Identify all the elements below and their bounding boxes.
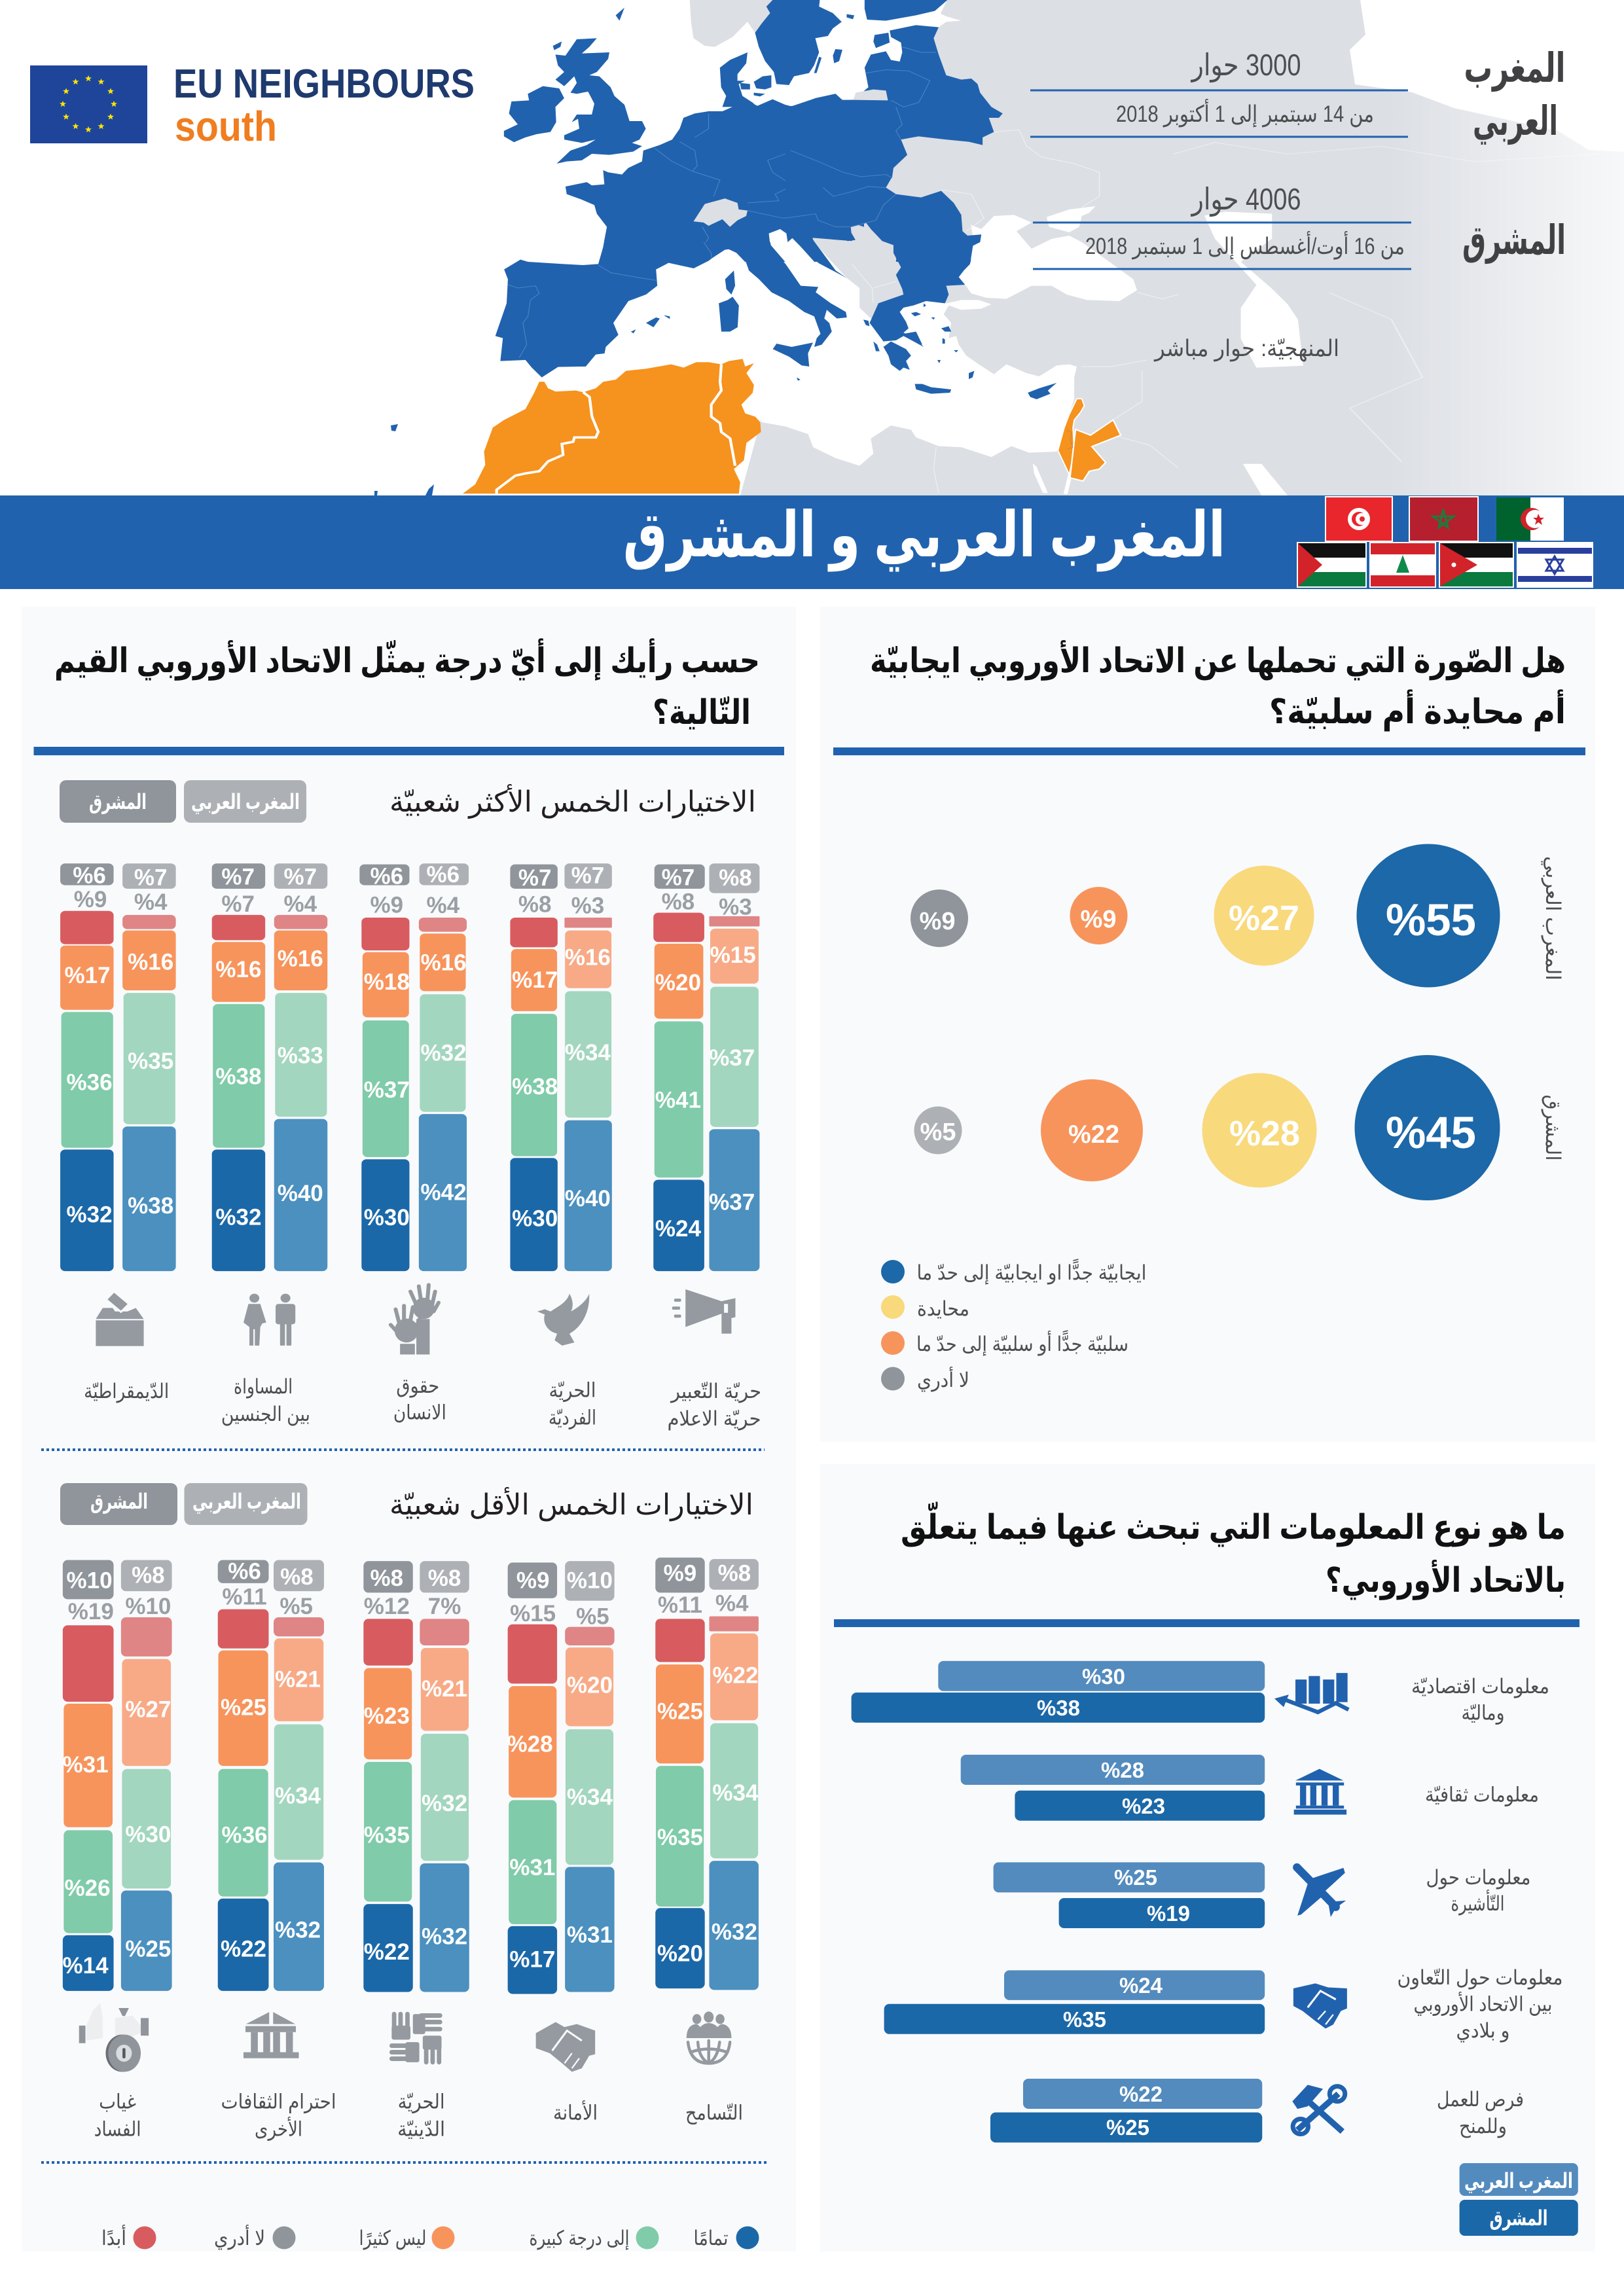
respect for other cultures: Maghreb bar: %32	[275, 1917, 321, 1943]
absence of corruption: Mashreq bar: %26	[65, 1876, 111, 1901]
subheading: five most popular: الاختيارات الخمس الأكثر شعبيّة	[389, 783, 756, 819]
freedom of expression: Mashreq bar: %20	[655, 970, 701, 996]
legend item: do not know: لا أدري	[214, 2225, 265, 2250]
bar group: cultural information	[961, 1755, 1265, 1821]
brand name: EU NEIGHBOURS	[173, 62, 475, 107]
legend item: do not know	[214, 2225, 296, 2250]
bubble: do not know 5	[914, 1106, 962, 1155]
freedom of expression: Maghreb bar: %37	[709, 1189, 755, 1215]
label: human rights	[393, 1374, 446, 1424]
tolerance: Maghreb bar	[709, 1559, 759, 1990]
human rights: Mashreq bar: %6	[370, 863, 403, 889]
religious freedom: Mashreq bar	[363, 1561, 413, 1992]
icon: handshake	[536, 2022, 595, 2072]
label: economic and financial information	[1411, 1675, 1549, 1725]
bubble: negative 9	[1070, 887, 1127, 944]
gender equality: Maghreb bar: %7	[283, 865, 317, 890]
label: democracy: الدّيمقراطيّة	[84, 1380, 169, 1403]
heading: EU values question	[54, 638, 760, 732]
gender equality: Mashreq bar	[212, 863, 265, 1271]
human rights: Mashreq bar: %37	[364, 1077, 410, 1103]
label: visa information: معلومات حول	[1426, 1866, 1530, 1890]
honesty: Mashreq bar	[507, 1562, 557, 1994]
democracy: Maghreb bar: %16	[128, 950, 173, 975]
gender equality: Maghreb bar: %16	[278, 946, 323, 971]
label: cooperation information	[1397, 1966, 1563, 2043]
label: gender equality: بين الجنسين	[221, 1403, 310, 1426]
religious freedom: Mashreq bar: %8	[370, 1566, 403, 1591]
label: freedom of expression and media: حريّة التّعبير	[670, 1380, 761, 1403]
legend item: neutral: محايدة	[917, 1297, 969, 1320]
legend item: do not know: لا أدري	[917, 1367, 969, 1392]
label: absence of corruption	[94, 2090, 141, 2141]
tolerance: Mashreq bar: %35	[657, 1825, 703, 1850]
bubble: do not know 9: %9	[920, 908, 955, 935]
label: cooperation information: و بلادي	[1456, 2019, 1509, 2043]
icon: classical building	[244, 2012, 298, 2058]
gender equality: Mashreq bar: %16	[215, 957, 261, 982]
label: human rights: الانسان	[393, 1401, 446, 1424]
freedom of expression: Maghreb bar: %8	[719, 865, 752, 891]
absence of corruption: Mashreq bar: %19	[68, 1599, 114, 1624]
legend chip: Maghreb	[185, 1483, 308, 1525]
icon: four joined hands	[391, 2014, 442, 2062]
label: jobs and grants: وللمنح	[1459, 2115, 1507, 2138]
label: individual freedom: الفرديّة	[549, 1407, 596, 1430]
religious freedom: Maghreb bar: %8	[428, 1566, 461, 1591]
label: freedom of expression and media	[668, 1380, 761, 1431]
legend item: to a large extent: إلى درجة كبيرة	[529, 2227, 630, 2250]
tolerance: Maghreb bar: %4	[715, 1591, 749, 1617]
honesty: Maghreb bar	[565, 1561, 615, 1992]
freedom of expression: Maghreb bar: %37	[709, 1045, 755, 1071]
honesty: Mashreq bar: %17	[509, 1947, 555, 1973]
label: human rights: حقوق	[396, 1374, 439, 1398]
freedom of expression: Maghreb bar: %15	[710, 942, 756, 968]
democracy: Maghreb bar: %4	[134, 889, 168, 915]
human rights: Maghreb bar: %4	[427, 893, 460, 918]
legend chip: Maghreb: المغرب العربي	[192, 1490, 301, 1514]
freedom of expression: Mashreq bar: %8	[662, 889, 695, 915]
religious freedom: Mashreq bar: %23	[364, 1703, 410, 1729]
religious freedom: Maghreb bar: 7%	[428, 1594, 461, 1619]
democracy: Maghreb bar: %35	[128, 1049, 173, 1074]
legend item: negative: سلبيّة جدًّا أو سلبيّة إلى حدّ ما	[916, 1329, 1128, 1356]
legend chip: Maghreb	[1460, 2163, 1578, 2196]
label: honesty: الأمانة	[553, 2100, 598, 2124]
fieldwork info: Mashreq	[1033, 182, 1411, 270]
freedom of expression: Mashreq bar: %24	[655, 1216, 701, 1242]
legend chip: Mashreq: المشرق	[1490, 2206, 1547, 2231]
respect for other cultures: Maghreb bar: %21	[275, 1666, 321, 1692]
individual freedom: Mashreq bar	[510, 865, 558, 1271]
icon: financial chart	[1274, 1673, 1348, 1712]
label: respect for other cultures: احترام الثقافات	[221, 2090, 336, 2113]
religious freedom: Maghreb bar: %32	[422, 1791, 467, 1816]
bubble: do not know 9	[911, 889, 968, 947]
label: economic and financial information: وماليّة	[1461, 1702, 1504, 1725]
human rights: Mashreq bar: %30	[364, 1205, 410, 1230]
honesty: Maghreb bar: %20	[567, 1673, 613, 1698]
heading: information sought question: بالاتحاد الأوروبي؟	[1326, 1559, 1566, 1600]
tolerance: Mashreq bar: %11	[658, 1592, 702, 1618]
absence of corruption: Maghreb bar: %27	[125, 1696, 171, 1722]
flag: Morocco	[1409, 496, 1479, 542]
bubble: negative 9: %9	[1081, 906, 1116, 933]
label: absence of corruption: غياب	[99, 2090, 136, 2113]
democracy: Mashreq bar: %9	[74, 887, 107, 912]
bar group: visa information	[994, 1862, 1265, 1928]
flags	[1297, 496, 1593, 588]
respect for other cultures: Maghreb bar: %8	[280, 1564, 314, 1590]
tolerance: Maghreb bar: %8	[718, 1561, 751, 1587]
honesty: Maghreb bar: %5	[576, 1604, 609, 1629]
region label: Maghreb: المغرب	[1464, 46, 1566, 92]
heading: EU values question: التّالية؟	[653, 694, 751, 732]
tolerance: Maghreb bar: %34	[712, 1780, 759, 1806]
icon: bribe and coin	[79, 2003, 149, 2072]
gender equality: Maghreb bar: %4	[283, 891, 317, 917]
bar group: cooperation information: %24	[1119, 1973, 1163, 1998]
bubble: positive 45: %45	[1386, 1107, 1476, 1158]
region label: Maghreb: العربي	[1473, 99, 1558, 145]
individual freedom: Mashreq bar: %7	[518, 865, 551, 891]
absence of corruption: Maghreb bar: %10	[125, 1594, 171, 1619]
icon: raised hands	[391, 1285, 439, 1354]
legend item: never	[101, 2225, 156, 2250]
human rights: Mashreq bar: %18	[364, 969, 410, 995]
religious freedom: Mashreq bar: %22	[364, 1939, 410, 1965]
freedom of expression: Maghreb bar	[709, 863, 759, 1271]
freedom of expression: Maghreb bar: %3	[719, 895, 752, 920]
flag: Israel	[1517, 542, 1593, 588]
legend item: not much: ليس كثيرًا	[359, 2227, 427, 2250]
label: cooperation information: معلومات حول التّعاون	[1397, 1966, 1563, 1990]
absence of corruption: Maghreb bar: %8	[132, 1563, 165, 1588]
democracy: Mashreq bar: %17	[65, 963, 111, 988]
bubble: positive 45	[1355, 1055, 1500, 1200]
heading: image of the EU question	[870, 639, 1566, 732]
bubble row: Mashreq	[914, 1055, 1500, 1200]
democracy: Maghreb bar: %38	[128, 1193, 173, 1219]
icon: building	[1294, 1769, 1346, 1815]
freedom of expression: Mashreq bar: %41	[655, 1087, 701, 1113]
label: gender equality	[221, 1375, 310, 1426]
legend item: do not know	[881, 1367, 969, 1392]
bar group: visa information: %25	[1114, 1865, 1157, 1890]
label: religious freedom: الحريّة	[398, 2090, 445, 2113]
region label: Maghreb	[1464, 46, 1566, 145]
bar group: economic and financial information: %30	[1082, 1664, 1125, 1689]
title band	[0, 495, 1624, 589]
subheading: five least popular: الاختيارات الخمس الأقل شعبيّة	[389, 1486, 753, 1522]
bubble: negative 22: %22	[1068, 1121, 1119, 1149]
legend chip: Mashreq	[60, 1483, 177, 1525]
legend item: neutral	[881, 1295, 969, 1320]
legend item: positive	[881, 1258, 1147, 1285]
row label: Mashreq: المشرق	[1541, 1094, 1564, 1161]
flag: Palestine	[1297, 542, 1367, 588]
respect for other cultures: Mashreq bar: %6	[228, 1558, 261, 1584]
brand name	[173, 62, 475, 150]
human rights: Maghreb bar: %6	[427, 862, 460, 888]
human rights: Maghreb bar: %32	[421, 1041, 467, 1066]
democracy: Mashreq bar: %6	[73, 863, 106, 889]
absence of corruption: Maghreb bar	[121, 1560, 172, 1991]
tolerance: Maghreb bar: %32	[712, 1919, 757, 1945]
individual freedom: Maghreb bar: %34	[565, 1040, 611, 1066]
absence of corruption: Mashreq bar: %14	[63, 1953, 109, 1979]
honesty: Mashreq bar: %31	[509, 1855, 555, 1880]
gender equality: Mashreq bar: %7	[221, 865, 255, 890]
religious freedom: Mashreq bar: %35	[364, 1822, 410, 1848]
tolerance: Maghreb bar: %22	[712, 1662, 758, 1688]
bubble: do not know 5: %5	[920, 1119, 956, 1146]
human rights: Maghreb bar: %42	[421, 1179, 467, 1205]
legend chip: Mashreq: المشرق	[89, 790, 147, 814]
heading: image of the EU question: أم محايدة أم سلبيّة؟	[1269, 689, 1566, 732]
fieldwork info: Maghreb: من 14 سبتمبر إلى 1 أكتوبر 2018	[1116, 99, 1374, 128]
fieldwork info: Mashreq: 4006 حوار	[1191, 182, 1301, 217]
icon: woman and man	[244, 1294, 295, 1346]
gender equality: Maghreb bar	[274, 863, 327, 1271]
legend chip: Mashreq	[1460, 2200, 1578, 2236]
respect for other cultures: Mashreq bar	[218, 1558, 268, 1991]
bar group: jobs and grants	[990, 2079, 1262, 2143]
gender equality: Mashreq bar: %7	[221, 891, 255, 917]
row label: Maghreb: المغرب العربي	[1541, 856, 1564, 980]
flag: Lebanon	[1369, 542, 1436, 588]
democracy: Mashreq bar: %36	[67, 1069, 113, 1095]
icon: tools	[1292, 2085, 1345, 2134]
bubble row: Maghreb	[911, 844, 1500, 987]
legend item: never: أبدًا	[101, 2225, 126, 2250]
flag: Algeria	[1496, 497, 1564, 541]
label: respect for other cultures	[221, 2090, 336, 2142]
bubble: positive 55	[1356, 844, 1500, 987]
democracy: Mashreq bar: %32	[67, 1202, 113, 1227]
label: gender equality: المساواة	[234, 1375, 293, 1399]
flag: Jordan	[1439, 542, 1514, 588]
bar group: cultural information: %23	[1122, 1794, 1165, 1818]
absence of corruption: Mashreq bar: %10	[67, 1568, 113, 1593]
bar group: economic and financial information: %38	[1037, 1696, 1080, 1720]
bubble: neutral 27	[1214, 865, 1314, 966]
label: jobs and grants: فرص للعمل	[1437, 2088, 1524, 2111]
gender equality: Mashreq bar: %38	[215, 1064, 261, 1090]
title band: المغرب العربي و المشرق	[623, 500, 1225, 572]
gender equality: Maghreb bar: %40	[278, 1181, 323, 1206]
democracy: Maghreb bar: %7	[134, 865, 167, 890]
label: tolerance: التّسامح	[685, 2101, 743, 2125]
respect for other cultures: Mashreq bar: %22	[221, 1936, 266, 1962]
individual freedom: Mashreq bar: %8	[518, 892, 551, 918]
respect for other cultures: Maghreb bar: %5	[280, 1594, 313, 1619]
bubble: negative 22	[1041, 1079, 1143, 1181]
label: absence of corruption: الفساد	[94, 2118, 141, 2141]
religious freedom: Mashreq bar: %12	[364, 1594, 410, 1619]
heading: EU values question: حسب رأيك إلى أيّ درجة يمثّل الاتحاد الأوروبي القيم	[54, 638, 760, 681]
legend chip: Mashreq	[60, 780, 176, 823]
gender equality: Maghreb bar: %33	[278, 1043, 323, 1069]
panel: information sought about the EU	[820, 1464, 1595, 2251]
stacked bar chart: five most popular	[60, 862, 761, 1431]
bar group: economic and financial information	[852, 1661, 1265, 1723]
flag: Tunisia	[1325, 496, 1393, 542]
label: religious freedom	[397, 2090, 445, 2141]
absence of corruption: Mashreq bar	[63, 1560, 114, 1991]
tolerance: Mashreq bar: %9	[664, 1561, 696, 1587]
individual freedom: Maghreb bar: %16	[565, 944, 611, 970]
icon: megaphone	[672, 1289, 735, 1334]
bar group: cooperation information	[884, 1970, 1265, 2034]
bubble: neutral 28: %28	[1229, 1114, 1300, 1153]
bar group: jobs and grants: %22	[1119, 2082, 1163, 2106]
fieldwork info: Mashreq: من 16 أوت/أغسطس إلى 1 سبتمبر 2018	[1085, 231, 1405, 260]
individual freedom: Mashreq bar: %30	[512, 1206, 558, 1231]
human rights: Mashreq bar: %9	[370, 892, 403, 918]
honesty: Maghreb bar: %31	[567, 1922, 613, 1948]
EU flag logo	[30, 65, 147, 143]
gender equality: Mashreq bar: %32	[215, 1204, 261, 1230]
human rights: Mashreq bar	[359, 863, 410, 1271]
legend: image categories	[881, 1258, 1147, 1392]
legend item: completely	[694, 2227, 759, 2250]
legend item: negative	[881, 1329, 1128, 1356]
icon: dove	[537, 1294, 589, 1346]
bubble: positive 55: %55	[1386, 895, 1476, 945]
bubble: neutral 27: %27	[1229, 899, 1299, 938]
human rights: Maghreb bar	[419, 862, 469, 1271]
tolerance: Mashreq bar: %25	[657, 1699, 703, 1725]
legend chip: Maghreb: المغرب العربي	[1464, 2169, 1573, 2193]
label: religious freedom: الدّينيّة	[397, 2118, 445, 2141]
map of Europe and the southern neighbourhood	[374, 0, 1624, 495]
religious freedom: Maghreb bar: %32	[422, 1924, 467, 1949]
freedom of expression: Mashreq bar	[653, 865, 705, 1271]
freedom of expression: Mashreq bar: %7	[662, 865, 695, 890]
label: freedom of expression and media: حريّة الاعلام	[668, 1407, 761, 1431]
respect for other cultures: Mashreq bar: %25	[221, 1695, 266, 1720]
absence of corruption: Maghreb bar: %30	[125, 1822, 171, 1848]
brand name: south	[175, 103, 277, 150]
honesty: Mashreq bar: %28	[507, 1731, 553, 1757]
label: economic and financial information: معلومات اقتصاديّة	[1411, 1675, 1549, 1698]
honesty: Maghreb bar: %34	[567, 1785, 613, 1810]
bar group: cultural information: %28	[1101, 1758, 1144, 1782]
label: cooperation information: بين الاتحاد الأوروبي	[1414, 1991, 1553, 2016]
individual freedom: Maghreb bar: %40	[565, 1186, 611, 1211]
heading: information sought question	[901, 1502, 1566, 1600]
individual freedom: Maghreb bar: %7	[571, 863, 604, 889]
absence of corruption: Maghreb bar: %25	[125, 1936, 171, 1962]
individual freedom: Mashreq bar: %17	[512, 967, 558, 993]
legend chip: Mashreq: المشرق	[90, 1490, 148, 1514]
methodology note: المنهجيّة: حوار مباشر	[1153, 336, 1339, 362]
stacked bar chart: five least popular	[63, 1558, 759, 2142]
respect for other cultures: Maghreb bar	[274, 1560, 324, 1991]
religious freedom: Maghreb bar	[420, 1561, 469, 1992]
democracy: Maghreb bar	[122, 863, 176, 1271]
fieldwork info: Maghreb: 3000 حوار	[1191, 48, 1301, 83]
label: individual freedom	[549, 1379, 596, 1430]
individual freedom: Maghreb bar: %3	[571, 893, 604, 919]
human rights: Maghreb bar: %16	[421, 950, 467, 975]
bar group: jobs and grants: %25	[1106, 2115, 1149, 2140]
respect for other cultures: Mashreq bar: %36	[221, 1822, 268, 1848]
label: individual freedom: الحريّة	[549, 1379, 596, 1403]
bubble: neutral 28	[1202, 1073, 1317, 1187]
panel: image of the EU	[820, 607, 1595, 1442]
tolerance: Mashreq bar	[655, 1558, 705, 1988]
label: respect for other cultures: الأخرى	[255, 2117, 302, 2142]
individual freedom: Maghreb bar	[564, 863, 612, 1271]
honesty: Maghreb bar: %10	[567, 1568, 613, 1593]
respect for other cultures: Maghreb bar: %34	[275, 1783, 321, 1808]
honesty: Mashreq bar: %9	[516, 1568, 549, 1593]
religious freedom: Maghreb bar: %21	[422, 1676, 467, 1702]
legend chip: Maghreb	[184, 780, 306, 823]
respect for other cultures: Mashreq bar: %11	[222, 1585, 267, 1610]
democracy: Mashreq bar	[60, 863, 114, 1271]
legend chip: Maghreb: المغرب العربي	[191, 790, 300, 814]
label: visa information	[1426, 1866, 1530, 1916]
icon: handshake	[1293, 1983, 1347, 2028]
icon: plane	[1297, 1867, 1346, 1917]
bar group: cooperation information: %35	[1063, 2007, 1106, 2032]
label: cultural information: معلومات ثقافيّة	[1425, 1783, 1539, 1806]
legend item: completely: تمامًا	[694, 2227, 728, 2250]
absence of corruption: Mashreq bar: %31	[63, 1752, 109, 1778]
bar group: visa information: %19	[1147, 1901, 1190, 1926]
tolerance: Mashreq bar: %20	[657, 1941, 703, 1966]
fieldwork info: Maghreb	[1030, 48, 1408, 137]
icons: information topics	[1274, 1673, 1348, 2134]
icon: globe with people	[687, 2011, 731, 2063]
label: visa information: التّأشيرة	[1451, 1890, 1504, 1916]
region label: Mashreq: المشرق	[1462, 218, 1566, 264]
label: jobs and grants	[1437, 2088, 1524, 2138]
honesty: Mashreq bar: %15	[510, 1601, 556, 1626]
legend item: positive: ايجابيّة جدًّا او ايجابيّة إلى حدّ ما	[916, 1258, 1147, 1285]
individual freedom: Mashreq bar: %38	[512, 1074, 558, 1100]
legend: answer categories	[101, 2225, 759, 2250]
icon: ballot box	[96, 1291, 144, 1346]
panel: EU values	[22, 607, 796, 2251]
